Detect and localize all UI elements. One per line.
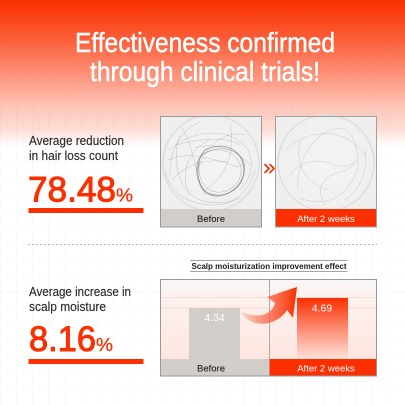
caption: After 2 weeks — [276, 209, 376, 227]
text block: hair loss reduction — [28, 133, 144, 213]
arrow: increase — [240, 287, 297, 324]
stat: 8.16%: 8.16 — [29, 320, 96, 359]
panel: before photo — [160, 115, 262, 227]
text block: scalp moisture — [28, 284, 144, 364]
photo frame — [276, 116, 376, 227]
chart background — [160, 280, 376, 359]
title: through clinical trials! — [90, 56, 320, 87]
label: hair loss — [29, 133, 124, 163]
category: After 2 weeks — [270, 359, 376, 376]
label: scalp moisture: Average increase in — [29, 284, 131, 299]
underline — [28, 359, 144, 364]
section divider — [28, 244, 377, 246]
category: After 2 weeks: After 2 weeks — [297, 364, 355, 374]
label: scalp moisture: scalp moisture — [29, 299, 106, 314]
chart frame — [160, 280, 376, 376]
caption: Before — [160, 209, 262, 227]
bar: before 4.34: 4.34 — [204, 312, 225, 324]
title: Effectiveness confirmed — [75, 27, 335, 58]
stat: 78.48%: 78.48 — [28, 170, 116, 210]
category: Before: Before — [197, 364, 225, 374]
bar: after 4.69 — [297, 298, 348, 359]
panel: after photo: After 2 weeks — [297, 214, 355, 225]
category: Before — [160, 359, 270, 376]
bar chart — [160, 280, 376, 376]
reference lines — [161, 298, 376, 308]
panel: before photo: Before — [197, 214, 225, 225]
chart heading: Scalp moisturization improvement effect — [192, 261, 347, 271]
background header gradient — [0, 0, 405, 146]
panel: after photo — [276, 115, 376, 227]
bar: after 4.69: 4.69 — [312, 302, 332, 314]
percent sign: % — [116, 186, 133, 206]
label: hair loss: in hair loss count — [29, 148, 118, 163]
bar: before 4.34 — [189, 308, 240, 359]
percent sign: % — [96, 335, 113, 355]
photo frame — [160, 116, 262, 227]
petri dish after — [276, 115, 376, 211]
icon: double chevron arrow — [264, 164, 274, 173]
divider — [268, 280, 270, 359]
title — [75, 27, 335, 87]
petri dish before — [160, 115, 262, 211]
label: hair loss: Average reduction — [29, 133, 124, 148]
underline — [28, 208, 144, 213]
label: scalp moisture — [29, 284, 131, 314]
